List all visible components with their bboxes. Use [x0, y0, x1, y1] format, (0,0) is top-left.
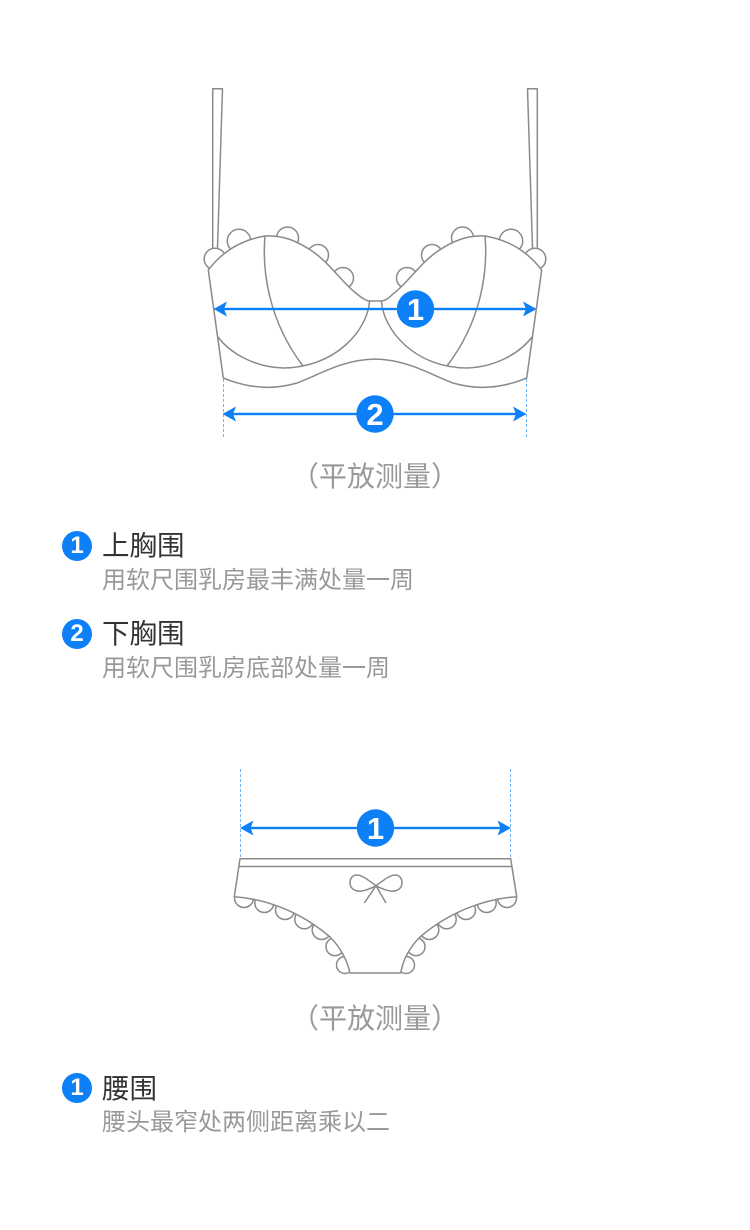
right cup [382, 301, 532, 368]
arrow waist [240, 820, 511, 836]
legend badge 2 [62, 619, 92, 649]
legend badge 1: 1 [70, 532, 84, 559]
text: upper bust instruction: 用软尺围乳房最丰满处量一周 [102, 567, 414, 594]
right strap [528, 89, 537, 250]
panty illustration [234, 859, 517, 974]
scallops [204, 227, 546, 288]
left seam [264, 236, 303, 366]
panty scallops [234, 888, 516, 974]
arrow 2 underbust [222, 406, 526, 422]
badge 2 underbust: 2 [366, 397, 384, 432]
panty body [234, 859, 517, 973]
heading: upper bust: 上胸围 [102, 530, 184, 561]
legend badge 2: 2 [70, 620, 84, 647]
bra body outline [208, 236, 542, 387]
left strap [213, 89, 222, 250]
heading: under bust: 下胸围 [102, 618, 184, 649]
badge waist: 1 [367, 811, 384, 846]
text: under bust instruction: 用软尺围乳房底部处量一周 [102, 655, 390, 682]
note: flat measure top: （平放测量） [291, 461, 459, 492]
badge 1 bust: 1 [407, 292, 424, 327]
dashed guides waist [240, 769, 510, 857]
arrow 1 bust [214, 302, 536, 316]
legend badge waist: 1 [70, 1074, 84, 1101]
left cup [218, 301, 370, 368]
badge 1 bust [397, 290, 434, 328]
waistband line [239, 866, 512, 868]
right seam [447, 236, 486, 366]
bow [350, 875, 402, 903]
note: flat measure bottom: （平放测量） [291, 1003, 459, 1034]
bra illustration [204, 89, 546, 387]
badge 2 underbust [356, 395, 394, 433]
dashed guides underbust [224, 379, 526, 438]
text: waist instruction: 腰头最窄处两侧距离乘以二 [102, 1109, 390, 1136]
legend badge 1 [62, 531, 92, 561]
legend badge waist [62, 1073, 92, 1103]
badge waist [357, 809, 394, 847]
heading: waist: 腰围 [102, 1073, 157, 1104]
